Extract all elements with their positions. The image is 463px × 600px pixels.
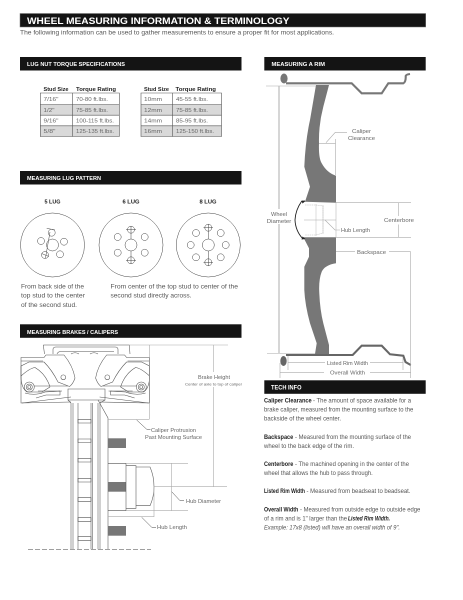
diagram: wheel studs <box>108 438 126 536</box>
table: fractional stud sizes: 9/16" <box>44 119 59 125</box>
text: backspace definition <box>263 434 412 450</box>
diagram: 5 lug <box>20 199 84 277</box>
table: metric stud sizes: 14mm <box>144 119 162 125</box>
diagram: hub <box>108 463 154 511</box>
dimension: caliper protrusion: Past Mounting Surface <box>145 435 202 441</box>
dimension: backspace <box>336 250 411 378</box>
dimension: caliper protrusion <box>108 345 202 441</box>
table: fractional stud sizes: 70-80 ft.lbs. <box>76 97 108 103</box>
dimension: caliper clearance: Clearance <box>348 136 375 142</box>
table: metric stud sizes: 45-55 ft.lbs. <box>176 97 208 103</box>
text: caliper clearance definition: brake caliper, measured from the mounting surface to the <box>264 406 414 413</box>
dimension: listed rim width <box>288 356 403 370</box>
diagram: 8 lug: 8 LUG <box>200 199 216 205</box>
panel: lug nut torque specifications <box>20 57 242 136</box>
heading: lug pattern <box>20 171 242 184</box>
table: fractional stud sizes: 5/8" <box>44 129 56 135</box>
heading: brakes and calipers: MEASURING BRAKES / CALIPERS <box>27 330 118 336</box>
diagram: 5 lug: 5 LUG <box>44 199 60 205</box>
table: metric stud sizes: 75-85 ft.lbs. <box>176 108 208 114</box>
text: caliper clearance definition: - The amount of space available for a <box>313 397 412 404</box>
title <box>20 14 426 27</box>
caption: 5 lug measurement: of the second stud. <box>21 302 77 309</box>
table: metric stud sizes <box>141 87 222 136</box>
heading: lug nut torque <box>20 57 242 70</box>
dimension: wheel diameter <box>266 86 316 354</box>
dimension: listed rim width: Listed Rim Width <box>327 361 368 367</box>
text: backspace definition: Backspace <box>264 434 294 441</box>
table: metric stud sizes: 85-95 ft.lbs. <box>176 119 208 125</box>
diagram: caliper <box>21 345 150 403</box>
text: listed rim width definition <box>264 488 411 495</box>
dimension: hub length: Hub Length <box>341 228 370 234</box>
text: overall width definition: - Measured from outside edge to outside edge <box>300 506 421 513</box>
dimension: caliper clearance <box>319 129 375 175</box>
dimension: hub length: Hub Length <box>157 525 187 531</box>
table: fractional stud sizes: Torque Rating <box>76 87 117 93</box>
text: caliper clearance definition <box>264 397 414 422</box>
text: listed rim width definition: - Measured from beadseat to beadseat. <box>306 488 411 495</box>
heading: tech info: TECH INFO <box>271 385 302 392</box>
heading: brakes and calipers <box>20 324 242 338</box>
diagram: 6 lug: 6 LUG <box>122 199 140 205</box>
dimension: overall width <box>280 363 411 378</box>
panel: tech info <box>263 380 426 531</box>
table: fractional stud sizes: 7/16" <box>44 97 59 103</box>
table: fractional stud sizes: Stud Size <box>44 87 68 93</box>
dimension: brake height: Center of axle to top of caliper <box>185 382 243 386</box>
caption: 6 and 8 lug measurement: From center of the top stud to center of the <box>110 284 239 290</box>
dimension: brake height <box>129 345 244 487</box>
table: fractional stud sizes: 1/2" <box>44 108 55 114</box>
text: caliper clearance definition: backside of the wheel center. <box>264 415 341 422</box>
text: centerbore definition: - The machined opening in the center of the <box>295 461 410 468</box>
dimension: hub length <box>325 220 370 234</box>
dimension: caliper protrusion: Caliper Protrusion <box>151 428 196 434</box>
heading: measuring a rim: MEASURING A RIM <box>272 62 325 68</box>
diagram: 6 lug <box>99 199 163 277</box>
table: fractional stud sizes: 100-115 ft.lbs. <box>76 119 114 125</box>
table: metric stud sizes: Stud Size <box>144 87 169 93</box>
title: WHEEL MEASURING INFORMATION & TERMINOLOGY <box>27 16 290 26</box>
heading: lug pattern: MEASURING LUG PATTERN <box>27 176 101 182</box>
text: overall width definition <box>264 506 421 531</box>
text: overall width definition: Listed Rim Width. <box>348 516 390 522</box>
text: caliper clearance definition: Caliper Clearance <box>264 397 312 404</box>
heading: tech info <box>264 380 426 394</box>
table: metric stud sizes: 16mm <box>144 129 162 135</box>
dimension: wheel diameter: Wheel <box>271 212 287 218</box>
dimension: brake height: Brake Height <box>198 375 230 381</box>
table: fractional stud sizes <box>40 87 119 136</box>
dimension: overall width: Overall Width <box>330 370 365 376</box>
dimension: backspace: Backspace <box>357 250 386 256</box>
caption: 5 lug measurement: From back side of the <box>21 284 85 290</box>
table: metric stud sizes: 12mm <box>144 108 162 114</box>
text: backspace definition: wheel to the back edge of the rim. <box>263 443 354 450</box>
caption: 5 lug measurement <box>21 284 85 309</box>
panel: measuring a rim <box>264 57 426 378</box>
diagram: brake rotor <box>71 400 108 549</box>
caption: 6 and 8 lug measurement: second stud directly across. <box>110 293 192 300</box>
text: overall width definition: of a rim and is 1" larger than the <box>264 515 348 522</box>
heading: measuring a rim <box>264 57 426 70</box>
diagram: rim cross-section <box>280 74 411 366</box>
caption: 6 and 8 lug measurement <box>110 284 239 300</box>
text: backspace definition: - Measured from the mounting surface of the <box>295 434 412 441</box>
heading: lug nut torque: LUG NUT TORQUE SPECIFICATIONS <box>27 62 125 68</box>
text: overall width definition: Example: 17x8 (listed) will have an overall width of 9". <box>264 524 400 531</box>
panel: measuring lug pattern <box>20 171 242 309</box>
intro text: The following information can be used to gather measurements to ensure a proper fit for most applications. <box>20 30 334 37</box>
text: centerbore definition: Centerbore <box>264 461 294 468</box>
caption: 5 lug measurement: top stud to the center <box>21 293 85 300</box>
dimension: centerbore <box>336 203 414 237</box>
table: fractional stud sizes: 75-85 ft.lbs. <box>76 108 108 114</box>
dimension: hub length <box>108 486 187 531</box>
center line <box>28 548 151 550</box>
text: listed rim width definition: Listed Rim Width <box>264 488 305 495</box>
dimension: caliper clearance: Caliper <box>352 129 371 135</box>
dimension: hub diameter <box>126 463 221 511</box>
panel: measuring brakes and calipers <box>20 324 244 549</box>
table: metric stud sizes: 125-150 ft.lbs. <box>176 129 214 135</box>
dimension: wheel diameter: Diameter <box>267 219 291 225</box>
table: fractional stud sizes: 125-135 ft.lbs. <box>76 129 114 135</box>
dimension: centerbore: Centerbore <box>384 218 414 224</box>
diagram: 8 lug <box>176 199 240 277</box>
text: overall width definition: Overall Width <box>264 506 299 513</box>
table: metric stud sizes: Torque Rating <box>176 87 217 93</box>
table: metric stud sizes: 10mm <box>144 97 162 103</box>
text: centerbore definition <box>263 461 410 477</box>
dimension: hub diameter: Hub Diameter <box>186 499 221 505</box>
text: centerbore definition: wheel that allows the hub to pass through. <box>263 470 373 477</box>
